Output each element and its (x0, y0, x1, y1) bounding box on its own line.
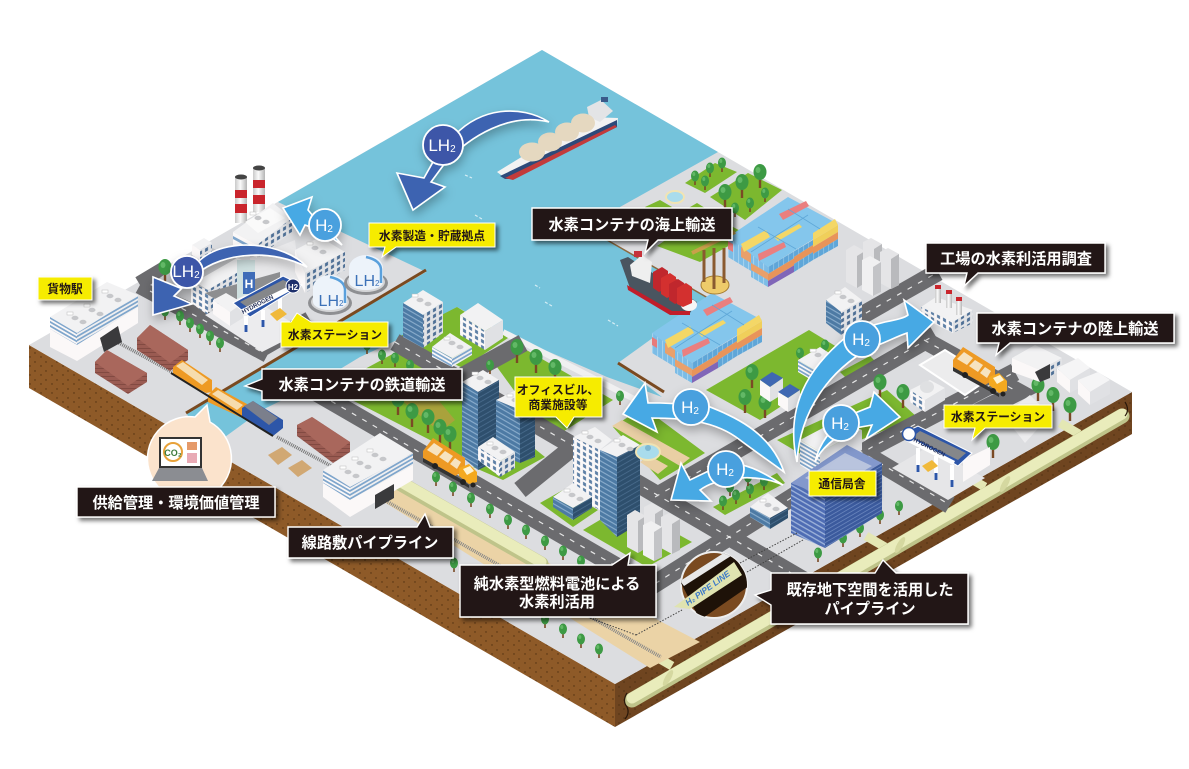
hydrogen station right: HYDROGEN (912, 437, 946, 459)
arrow: H2 to fuel cell: 2 (728, 468, 734, 479)
tank 1 (308, 275, 352, 315)
label: supply management: 供給管理・環境価値管理 (92, 494, 260, 512)
label: existing underground pipeline: 既存地下空間を活用した (786, 581, 954, 599)
label: hydrogen station right (944, 405, 1052, 440)
container stack upper (728, 197, 838, 287)
mid buildings (403, 290, 503, 367)
arrow: H2 from plant (283, 197, 342, 245)
label: production and storage base (369, 223, 495, 257)
label: maritime transport: 水素コンテナの海上輸送 (548, 216, 716, 234)
label: hydrogen station left: 水素ステーション (288, 328, 382, 342)
telecom building (791, 445, 882, 548)
hydrogen station left (213, 272, 302, 332)
underground pipeline on right face (624, 402, 1128, 719)
label: existing underground pipeline (755, 560, 968, 624)
label: rail transport (245, 369, 462, 400)
hydrogen station left: HYDROGEN (241, 295, 275, 316)
arrow: H2 to fuel cell (671, 451, 783, 501)
hydrogen fuel cell units upper (846, 238, 899, 296)
label: fuel cell use: 純水素型燃料電池による (474, 575, 640, 593)
arrow: LH2 to freight (153, 245, 307, 315)
arrow: H2 to factory (794, 300, 934, 462)
label: office and commercial: オフィスビル、 (517, 383, 599, 397)
label: production and storage base: 水素製造・貯蔵拠点 (379, 229, 485, 243)
tank 1: LH2 (319, 293, 344, 310)
wave marks (465, 175, 618, 326)
label: supply management (77, 487, 275, 517)
arrow: H2 to station (815, 392, 900, 462)
callout: supply management laptop: CO₂ (164, 448, 182, 458)
label: office and commercial (515, 377, 602, 428)
container ship (620, 251, 697, 315)
freight station left (50, 282, 138, 361)
soil left face (29, 345, 615, 727)
label: telecom building: 通信局舎 (818, 477, 866, 491)
arrow: LH2 to freight: LH (172, 262, 194, 281)
hydrogen production and storage base (150, 166, 388, 352)
small white building by telecom (750, 493, 788, 529)
roads (140, 267, 1018, 590)
ground surface (29, 50, 1132, 684)
tower near factory road (826, 287, 862, 335)
lot of hydrogen station (205, 295, 305, 352)
arrow: H2 to office (623, 383, 784, 472)
hydrogen station left: H2 (288, 283, 299, 292)
arrow: LH2 to port (397, 111, 549, 210)
factory (921, 285, 973, 333)
wooden pallets (268, 447, 312, 477)
surface pipeline along railway (396, 479, 541, 564)
arrow: LH2 to freight: 2 (194, 270, 200, 281)
tank 2: LH2 (355, 273, 380, 290)
low buildings centre right (798, 347, 862, 478)
label: maritime transport (532, 208, 732, 253)
label: factory survey (926, 243, 1105, 286)
hydrogen station right (892, 426, 990, 500)
railway strip (110, 338, 700, 668)
label: trackside pipeline: 線路敷パイプライン (302, 534, 438, 552)
label: telecom building (809, 471, 876, 496)
arrow: H2 to office: 2 (693, 406, 699, 417)
green plots (352, 163, 917, 567)
arrow: H2 to factory: H (852, 330, 864, 349)
freight train (171, 360, 283, 436)
hydrogen fuel cell units (627, 503, 680, 561)
label: hydrogen station right: 水素ステーション (951, 410, 1045, 424)
label: fuel cell use: 水素利活用 (519, 594, 595, 611)
houses (760, 372, 800, 412)
label: freight station: 貨物駅 (47, 282, 83, 296)
label: rail transport: 水素コンテナの鉄道輸送 (278, 376, 446, 394)
label: land transport: 水素コンテナの陸上輸送 (991, 320, 1159, 338)
plant buildings (150, 203, 345, 322)
arrow: H2 to station: 2 (843, 422, 849, 433)
arrow: H2 to factory: 2 (864, 338, 870, 349)
arrow: H2 to station: H (831, 414, 843, 433)
callout: supply management laptop (147, 405, 231, 501)
label: trackside pipeline (288, 514, 453, 558)
soil right face (615, 392, 1132, 727)
truck right (953, 347, 1007, 397)
dotted underground route (590, 533, 803, 635)
gantry crane (692, 232, 735, 294)
arrow: LH2 to port: 2 (450, 144, 456, 155)
label: hydrogen station left (281, 313, 388, 347)
arrow: LH2 to port: LH (428, 136, 450, 155)
callout: pipe cross section: H₂ PIPE LINE (683, 568, 732, 608)
label: office and commercial: 商業施設等 (528, 398, 588, 412)
roadside trees (161, 306, 903, 658)
arrow: H2 to fuel cell: H (716, 460, 728, 479)
quays (186, 240, 708, 413)
label: factory survey: 工場の水素利活用調査 (940, 251, 1092, 268)
trees in plots (363, 158, 1076, 510)
label: land transport (977, 313, 1174, 355)
hydrogen station left: H (245, 277, 253, 291)
arrow: H2 from plant: 2 (327, 224, 333, 235)
label: fuel cell use (460, 553, 656, 617)
label: freight station (38, 277, 92, 300)
container stack lower (652, 293, 762, 383)
arrow: H2 to office: H (681, 398, 693, 417)
office towers cluster (462, 370, 640, 537)
tank 2 (344, 255, 388, 295)
freight station right (323, 433, 413, 517)
LNG carrier (497, 97, 618, 180)
label: existing underground pipeline: パイプライン (824, 601, 916, 618)
chimneys (235, 166, 265, 223)
facility right (910, 345, 1110, 443)
callout: pipe cross section (674, 549, 752, 620)
arrow: H2 from plant: H (315, 216, 327, 235)
brick container stacks (95, 325, 350, 463)
water: sea and river (186, 50, 718, 442)
park fountain (636, 191, 684, 460)
truck left (423, 438, 477, 488)
